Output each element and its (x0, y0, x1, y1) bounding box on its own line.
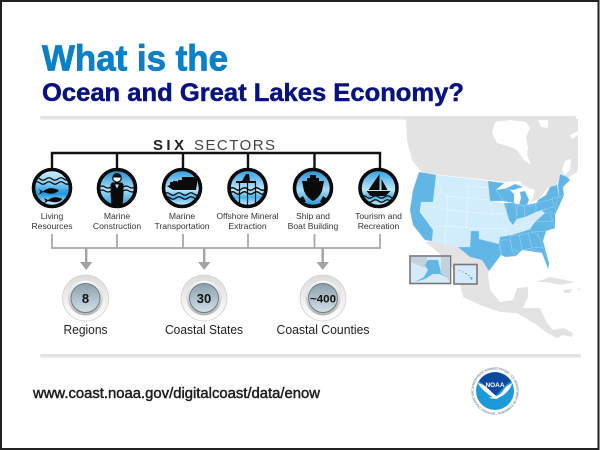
heading: six sectors (153, 137, 275, 154)
stat: regions (62, 275, 108, 337)
map: Mexico and Central America (425, 241, 573, 338)
stat: coastal states (165, 275, 243, 337)
icon: tourism and recreation (360, 170, 397, 206)
icon: offshore mineral extraction (229, 170, 266, 206)
map: coastal states (410, 172, 570, 271)
arrow: to regions (80, 248, 92, 270)
stat: coastal counties (276, 275, 370, 337)
arrow: to coastal states (198, 248, 210, 270)
icon: NOAA logo: NOAA (486, 382, 505, 389)
title (42, 38, 464, 107)
stat: coastal counties: Coastal Counties (276, 322, 370, 337)
title line 2: Ocean and Great Lakes Economy? (42, 79, 464, 107)
stat: coastal states: Coastal States (165, 322, 243, 337)
connector: gray bracket (52, 234, 380, 248)
top rule (40, 116, 576, 120)
icon: NOAA logo: NATIONAL OCEANIC AND ATMOSPHERIC ADMINISTRATION · U.S. DEPARTMENT OF COMMERCE (472, 368, 518, 414)
icon: ship and boat building (294, 170, 332, 206)
label: marine construction: Construction (93, 221, 141, 231)
label: offshore mineral extraction: Extraction (228, 221, 267, 231)
label: ship and boat building: Ship and (296, 211, 330, 221)
stat: regions: Regions (64, 322, 108, 337)
title line 1: What is the (42, 38, 228, 78)
label: marine construction: Marine (104, 211, 130, 221)
inset: Hawaii (454, 264, 477, 284)
icon: marine construction (98, 170, 136, 206)
connector: black bracket (52, 153, 380, 170)
label: ship and boat building: Boat Building (288, 221, 339, 231)
inset: Alaska (410, 256, 450, 284)
heading: six sectors: SECTORS (194, 137, 275, 154)
label: offshore mineral extraction: Offshore Mineral (216, 211, 279, 221)
stat: coastal states: 30 (197, 291, 211, 306)
heading: six sectors: SIX (153, 137, 184, 154)
label: tourism and recreation: Tourism and (355, 211, 402, 221)
label: living resources: Resources (31, 221, 73, 231)
map of North America (406, 119, 581, 338)
label: marine transportation: Transportation (154, 221, 210, 231)
arrow: to coastal counties (316, 248, 329, 270)
map: inland states (421, 175, 545, 247)
icon: marine transportation (164, 170, 200, 206)
stat: regions: 8 (82, 291, 89, 306)
url text: www.coast.noaa.gov/digitalcoast/data/enow (32, 386, 321, 402)
map: Canada (406, 119, 578, 204)
label: tourism and recreation: Recreation (358, 221, 399, 231)
map: Hudson Bay (492, 120, 578, 175)
icon: living resources (34, 170, 70, 206)
label: living resources: Living (41, 211, 63, 221)
bottom rule (40, 354, 581, 358)
stat: coastal counties: ~400 (310, 294, 336, 306)
label: marine transportation: Marine (169, 211, 195, 221)
map: Caribbean islands (537, 277, 581, 293)
